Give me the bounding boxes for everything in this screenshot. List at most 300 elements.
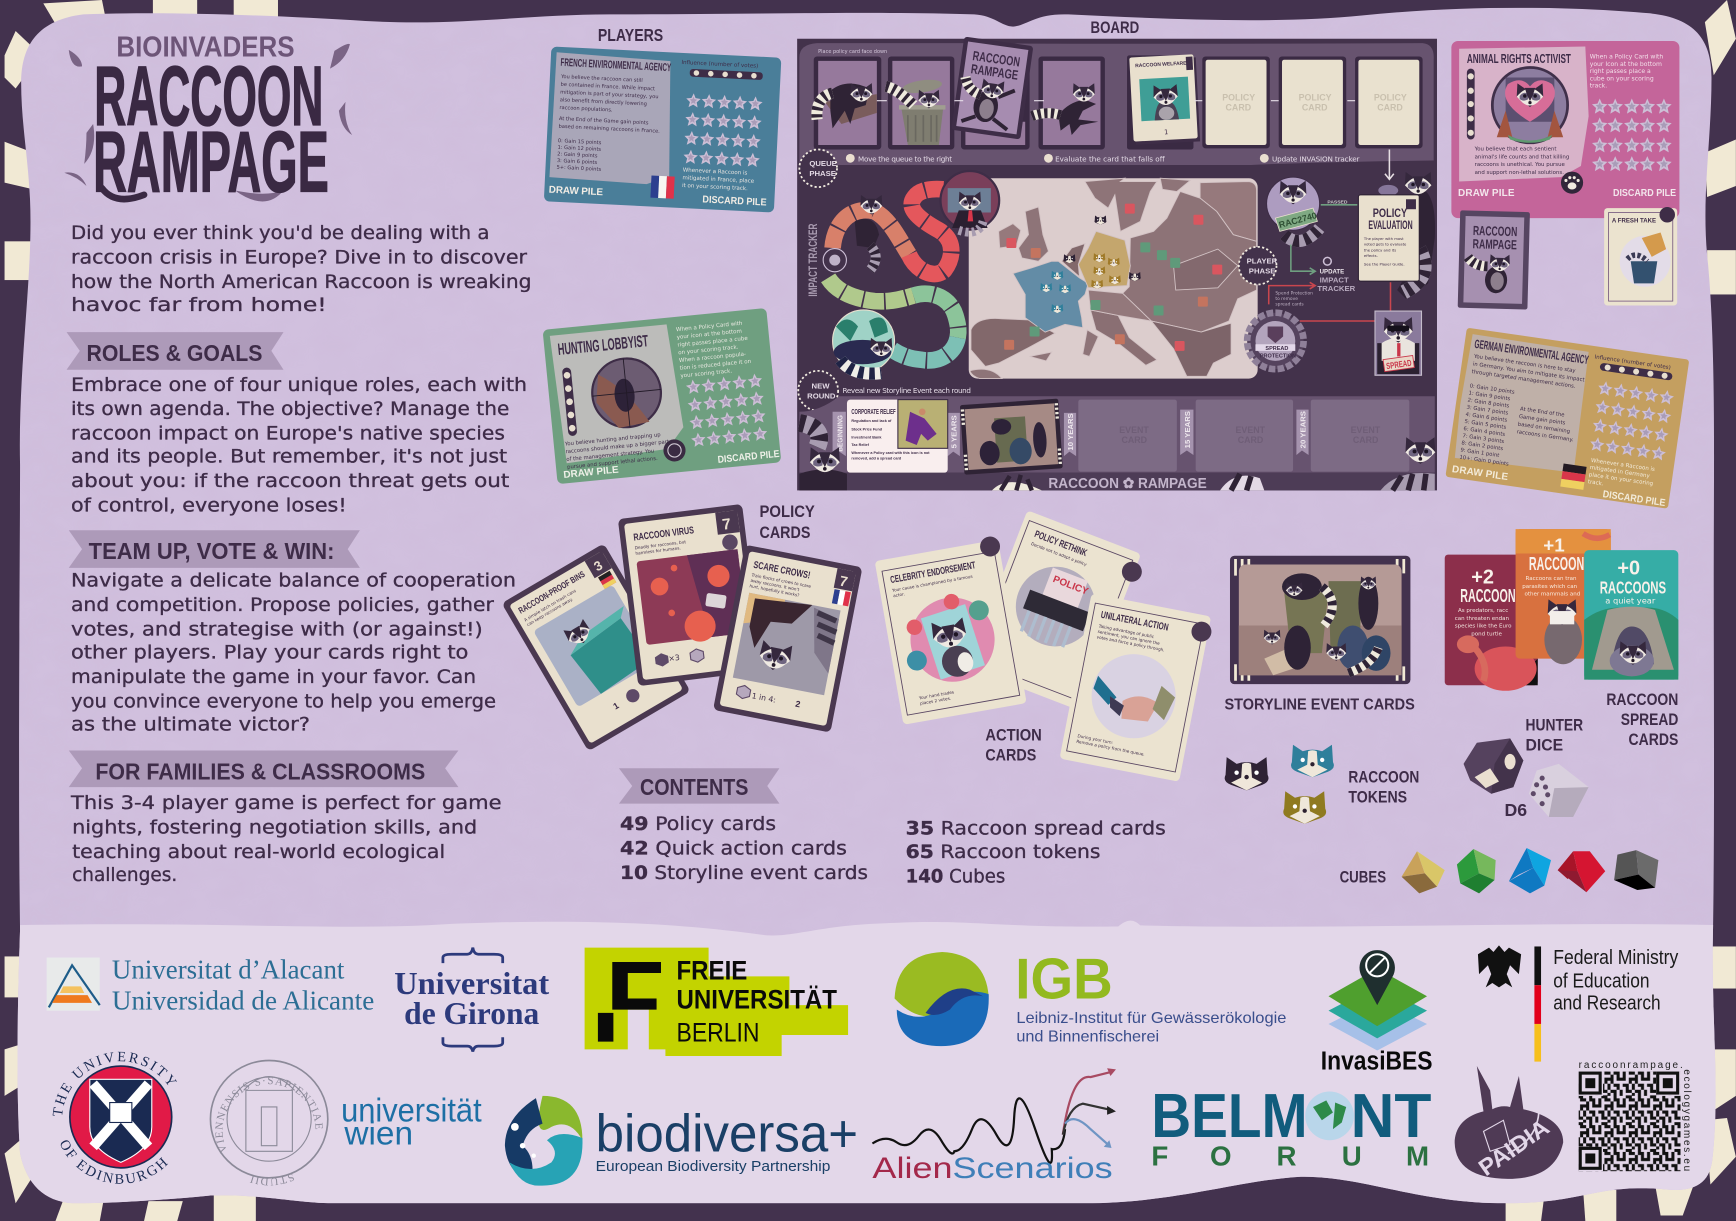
label: hunter dice: [1526, 716, 1583, 755]
raccoon spread card +2: [1445, 555, 1538, 691]
action card: policy rethink: POLICY: [1051, 574, 1090, 598]
logo: IGB: Leibniz-Institut für Gewässerökologie: [1016, 1010, 1286, 1027]
title logo: [64, 31, 352, 211]
logo: Federal Ministry of Education and Research: Federal Ministry: [1553, 947, 1678, 969]
player board: Animal Rights Activist: DISCARD PILE: [1613, 188, 1676, 199]
player board: German Environmental Agency: DRAW PILE: [1451, 464, 1509, 483]
raccoon spread card +1: other mammals and: [1524, 592, 1580, 598]
player board: Hunting Lobbyist: When a raccoon popula-: [679, 352, 746, 364]
board: player phase marker: PLAYER: [1247, 256, 1278, 265]
player board: Animal Rights Activist: [1451, 41, 1679, 218]
player board: Animal Rights Activist: When a Policy Card with: [1590, 54, 1663, 61]
icon: hunter die: [1464, 738, 1523, 794]
action card: celebrity endorsement: actor.: [893, 591, 905, 598]
board: events band: [799, 396, 1435, 492]
action card: policy rethink: Decide not to adopt a policy: [1030, 541, 1088, 567]
player board: German Environmental Agency: 10+: Gain 0 points: [1459, 455, 1509, 468]
board: bottom banner: [992, 474, 1264, 492]
action card: unilateral action: UNILATERAL ACTION: [1100, 610, 1169, 634]
player board: Hunting Lobbyist: You believe hunting and trapping up: [564, 432, 662, 448]
icon: sleeping raccoon on log: [817, 83, 877, 128]
label: d6: D6: [1505, 800, 1527, 820]
roles text: its own agenda. The objective? Manage the: [71, 399, 509, 420]
board: events band: CARD: [1121, 435, 1148, 445]
board: policy evaluation card: EVALUATION: [1368, 218, 1413, 232]
board: Europe map: [969, 178, 1258, 379]
action card: celebrity endorsement: [874, 535, 1028, 725]
contents list right: 140 Cubes: [906, 866, 1005, 887]
player board: French Environmental Agency: 2: Gain 9 points: [557, 151, 598, 159]
board: spread raccoon card: [1375, 311, 1421, 375]
families text: challenges.: [72, 865, 177, 886]
heading: team up: [69, 530, 360, 568]
card: corporate relief: removed, add a spread card: [851, 456, 902, 460]
action card: policy rethink: [967, 510, 1148, 714]
board: new round marker: NEW: [812, 382, 830, 391]
policy card: raccoon virus: ×3: [668, 653, 680, 663]
card: storyline on board: [960, 399, 1063, 475]
logo: Belmont Forum: M: [1406, 1141, 1429, 1172]
logo: Universitat de Girona: Universitat: [394, 965, 550, 1001]
action card: unilateral action: During your turn:: [1077, 733, 1113, 745]
logo: Universitaet Wien seal: universität: [341, 1092, 482, 1129]
player board: German Environmental Agency: 8: Gain 2 points: [1461, 440, 1504, 452]
raccoon tokens: [1225, 745, 1334, 824]
player board: German Environmental Agency: DISCARD PILE: [1602, 489, 1666, 509]
board: queue band: CARD: [1377, 103, 1403, 113]
logo: Freie Universitaet Berlin: FREIE: [676, 956, 747, 986]
team up text: you convince everyone to help you emerge: [71, 691, 496, 712]
board: queue band: POLICY: [1299, 93, 1332, 103]
player board: French Environmental Agency: 1: Gain 12 points: [557, 145, 602, 153]
policy card: raccoon virus: [618, 504, 762, 686]
board: arrows and update label: Spend Protection: [1275, 290, 1313, 296]
board: policy evaluation card: [1358, 195, 1419, 281]
label: board: BOARD: [1091, 18, 1139, 37]
logo: Paidia: PAIDIA: [1474, 1114, 1554, 1181]
raccoon spread card +1: parasites which can: [1522, 584, 1578, 590]
contents list right: 35 Raccoon spread cards: [906, 819, 1166, 840]
heading: roles and goals: ROLES & GOALS: [86, 340, 262, 366]
raccoon spread card +0: +0: [1617, 558, 1640, 580]
action card: celebrity endorsement: CELEBRITY ENDORSEMENT: [889, 560, 976, 586]
player board: German Environmental Agency: in Germany. You aim to mitigate its impact: [1472, 361, 1585, 383]
roles text: about you: if the raccoon threat gets out: [71, 471, 509, 492]
player board: Hunting Lobbyist: of the management strategy. You: [566, 448, 654, 463]
player board: French Environmental Agency: [544, 46, 781, 213]
logo: Belmont Forum: [1151, 1082, 1432, 1172]
player board: Animal Rights Activist: ANIMAL RIGHTS ACTIVIST: [1467, 51, 1571, 66]
logo: Freie Universitaet Berlin: BERLIN: [676, 1018, 760, 1048]
families text: nights, fostering negotiation skills, and: [72, 818, 477, 839]
policy card: scare crows: SCARE CROWS!: [752, 560, 811, 582]
policy card stack on board: 1: [1164, 128, 1169, 136]
logo: Universitaet Wien seal: STUDII: [250, 1174, 294, 1186]
action card: policy rethink: POLICY RETHINK: [1033, 529, 1089, 559]
team up text: and competition. Propose policies, gather: [71, 595, 494, 616]
player board: German Environmental Agency: Game gain points: [1518, 414, 1566, 427]
player board: German Environmental Agency: Whenever a Raccoon is: [1590, 458, 1655, 473]
policy card: scare crows: 7: [838, 574, 849, 591]
policy card: raccoon-proof bins: 3: [591, 558, 605, 574]
QR code: ecologygames.eu: [1681, 1069, 1692, 1171]
board: arrows and update label: to remove: [1275, 296, 1298, 302]
label: storyline event cards: STORYLINE EVENT CARDS: [1224, 697, 1415, 714]
raccoon spread card +1: RACCOON: [1529, 553, 1584, 574]
player board: French Environmental Agency: mitigation is part of your strategy, you: [560, 89, 659, 100]
board: arrows and update label: TRACKER: [1317, 284, 1356, 293]
logo: InvasiBES: [1321, 950, 1433, 1075]
player board: French Environmental Agency: DISCARD PILE: [702, 194, 767, 209]
raccoon spread card +2: As predators, racc: [1458, 608, 1508, 614]
label: cubes: CUBES: [1340, 867, 1386, 886]
board: queue band: Move the queue to the right: [858, 155, 952, 164]
card: corporate relief: CORPORATE RELIEF: [851, 407, 896, 416]
card: corporate relief: Investment Bank: [851, 435, 882, 439]
policy card: scare crows: 1 in 4:: [751, 691, 777, 705]
logo: IGB: und Binnenfischerei: [1016, 1029, 1159, 1046]
policy card: raccoon-proof bins: 1: [611, 700, 621, 712]
player board: French Environmental Agency: based on remaining raccoons in France.: [558, 124, 660, 135]
player board: Hunting Lobbyist: right passes place a cube: [677, 336, 749, 349]
player board: Hunting Lobbyist: tion is reduced place it on: [680, 359, 752, 372]
logo: Belmont Forum: O: [1210, 1141, 1232, 1172]
player board: Hunting Lobbyist: raccoons should make up a bigger part: [565, 439, 669, 455]
player board: German Environmental Agency: At the End of the: [1520, 406, 1565, 419]
logo: Freie Universitaet Berlin: UNIVERSITÄT: [676, 984, 837, 1014]
contents heading: CONTENTS: [640, 774, 748, 800]
board: policy evaluation card: POLICY: [1373, 206, 1407, 220]
raccoon spread card +1: [1516, 529, 1611, 664]
player board: German Environmental Agency: raccoons in Germany.: [1516, 429, 1574, 443]
logo: Federal Ministry of Education and Research: of Education: [1553, 970, 1650, 992]
logo: AlienScenarios: [872, 1068, 1116, 1185]
player board: German Environmental Agency: GERMAN ENVIRONMENTAL AGENCY: [1474, 337, 1590, 367]
player board: Hunting Lobbyist: on your scoring track.: [678, 344, 739, 356]
board: impact tracker label: IMPACT TRACKER: [806, 223, 820, 297]
icon: raccoon heart sign: [1492, 68, 1568, 143]
policy card: scare crows: Train flocks of crows to scare: [750, 572, 812, 589]
intro text: Did you ever think you'd be dealing with a: [71, 223, 489, 244]
player board: German Environmental Agency: 4: Gain 6 points: [1465, 412, 1508, 424]
icon: running raccoon: [1032, 83, 1098, 135]
board: policy evaluation card: voted gets to evaluate: [1364, 243, 1407, 247]
logo: IGB: [895, 947, 1286, 1046]
raccoon spread card +0: a quiet year: [1605, 595, 1656, 605]
title logo: BIOINVADERS: [116, 31, 295, 63]
player board: Animal Rights Activist: You believe that each sentient: [1474, 147, 1557, 153]
player board: French Environmental Agency: it on your scoring track.: [682, 183, 748, 192]
board: lobbyist raccoon circle: RAC2740: [1278, 210, 1318, 230]
player board: German Environmental Agency: Influence (number of votes): [1594, 354, 1671, 371]
board: queue phase marker: PHASE: [809, 169, 836, 178]
logo: Belmont Forum: R: [1276, 1141, 1296, 1172]
board: policy evaluation card: See the Player Guide.: [1364, 263, 1405, 267]
contents list left: 42 Quick action cards: [620, 839, 847, 860]
player board: German Environmental Agency: 7: Gain 3 points: [1462, 433, 1505, 445]
board: events band: 20 YEARS: [1298, 411, 1307, 448]
policy card: raccoon virus: RACCOON VIRUS: [633, 525, 695, 544]
impact tracker path: [828, 189, 958, 360]
policy card back: RAMPAGE: [1472, 236, 1517, 252]
team up text: Navigate a delicate balance of cooperation: [71, 571, 516, 592]
board: new round marker: ROUND: [807, 392, 836, 401]
player board: Hunting Lobbyist: [543, 308, 781, 484]
logo: Universitat de Girona: de Girona: [404, 995, 539, 1031]
board: player phase marker: [1239, 247, 1278, 284]
policy card: scare crows: 2: [794, 699, 801, 709]
player board: German Environmental Agency: 2: Gain 8 points: [1467, 398, 1510, 410]
logo: Belmont Forum: F: [1151, 1141, 1168, 1172]
policy card back: RACCOON: [1473, 223, 1517, 239]
raccoon spread card +2: +2: [1471, 566, 1494, 588]
player board: French Environmental Agency: also benefit from directly lowering: [560, 97, 647, 107]
board: policy evaluation card: The player with most: [1363, 237, 1404, 241]
player board: German Environmental Agency: track.: [1587, 479, 1604, 487]
roles text: [71, 375, 527, 516]
board: queue band: CARD: [1302, 103, 1328, 113]
label: raccoon tokens: [1348, 768, 1419, 807]
label: policy cards: [760, 502, 815, 542]
player board: German Environmental Agency: mitigated in Germany: [1589, 465, 1651, 480]
intro text: raccoon crisis in Europe? Dive in to discover: [71, 247, 527, 268]
logo: Freie Universitaet Berlin: [585, 948, 848, 1056]
policy card: raccoon-proof bins: [502, 543, 691, 751]
storyline event card: [1230, 556, 1410, 684]
board: queue band: POLICY: [1222, 93, 1255, 103]
player board: German Environmental Agency: based on remaining: [1517, 422, 1570, 435]
player board: Animal Rights Activist: animal's life counts and that killing: [1475, 154, 1569, 160]
policy card: raccoon virus: harmless for humans.: [635, 545, 681, 556]
board: events band: CARD: [1238, 435, 1264, 445]
board: policy evaluation card: effects.: [1364, 254, 1378, 258]
board: raccoon behind policy evaluation: [1378, 172, 1435, 299]
player board: German Environmental Agency: 5: Gain 5 points: [1464, 419, 1507, 431]
raccoon spread card +0: RACCOONS: [1600, 577, 1666, 597]
label: raccoon spread cards: [1606, 690, 1678, 749]
card back on board: RACCOON: [972, 48, 1021, 70]
player board: German Environmental Agency: [1445, 328, 1689, 510]
team up text: votes, and strategise with (or against!): [71, 619, 483, 640]
contents list left: [620, 814, 868, 884]
player board: German Environmental Agency: place it on your scoring: [1588, 472, 1653, 487]
team up text: other players. Play your cards right to: [71, 643, 468, 664]
team up text: manipulate the game in your favor. Can: [71, 667, 476, 688]
policy card stack on board: [1127, 54, 1200, 149]
board: bottom banner: RACCOON ✿ RAMPAGE: [1048, 476, 1207, 492]
contents list right: [906, 819, 1166, 887]
policy card: scare crows: away raccoons. It won't: [750, 578, 800, 592]
board: spread raccoon card: SPREAD: [1386, 358, 1413, 371]
action card: celebrity endorsement: places 2 votes.: [920, 696, 951, 706]
label: policy cards: CARDS: [760, 523, 810, 542]
logo: InvasiBES: InvasiBES: [1321, 1047, 1433, 1075]
QR code: [1579, 1060, 1692, 1171]
logo: Belmont Forum: NT: [1351, 1082, 1432, 1151]
logo: biodiversa+: European Biodiversity Partnership: [596, 1159, 830, 1175]
heading: team up: TEAM UP, VOTE & WIN:: [89, 538, 334, 564]
policy card: raccoon-proof bins: RACCOON-PROOF BINS: [517, 569, 587, 616]
logo: AlienScenarios: Alien Scenarios: [872, 1152, 1113, 1185]
board: queue band: Evaluate the card that falls off: [1055, 155, 1166, 164]
board: spread protection wheel: SPREAD: [1265, 346, 1288, 352]
board: arrows and update label: IMPACT: [1320, 275, 1349, 284]
logo: Belmont Forum: U: [1342, 1141, 1362, 1172]
policy card: raccoon virus: 7: [721, 516, 732, 534]
families text: teaching about real-world ecological: [72, 842, 445, 863]
player board: French Environmental Agency: 5+: Gain 0 points: [556, 165, 602, 173]
logo: University of Edinburgh: OF EDINBURGH: [60, 1140, 168, 1184]
board: events band: EVENT: [1119, 425, 1149, 435]
player board: Animal Rights Activist: raccoons is unethical. You pursue: [1475, 162, 1566, 168]
intro text: [71, 223, 531, 316]
player board: French Environmental Agency: be contained in France. While impact: [560, 82, 655, 92]
logo: Universitaet Wien seal: VIENNENSIS S·SAPIENTIAE: [215, 1078, 323, 1154]
player board: German Environmental Agency: 0: Gain 10 points: [1469, 383, 1515, 396]
board: player phase marker: PHASE: [1249, 266, 1275, 275]
board: events band: EVENT: [1236, 425, 1266, 435]
card back on board: [951, 37, 1033, 139]
board: queue band: Update INVASION tracker: [1272, 155, 1360, 164]
player board: Animal Rights Activist: DRAW PILE: [1458, 188, 1515, 199]
label: players: PLAYERS: [598, 25, 663, 45]
QR code: raccoonrampage.: [1579, 1060, 1683, 1071]
board: queue band: Place policy card face down: [818, 49, 887, 55]
label: action cards: [985, 726, 1042, 764]
icon: politician raccoon circle: [941, 171, 999, 232]
roles text: of control, everyone loses!: [71, 495, 347, 516]
icon: green sleeping raccoon circle: [833, 310, 895, 374]
card: corporate relief: Stock Price Fund: [851, 428, 883, 432]
player board: Animal Rights Activist: right passes place a: [1590, 68, 1651, 75]
player board: French Environmental Agency: 3: Gain 6 points: [557, 158, 598, 166]
player board: Animal Rights Activist: and support non-lethal solutions.: [1475, 170, 1564, 176]
board: spread protection wheel: PROTECTION: [1260, 354, 1296, 360]
logo: biodiversa+: [505, 1096, 858, 1186]
policy card: scare crows: hurt, hopefully it works?: [749, 583, 800, 598]
policy card: raccoon virus: Deadly for raccoons, but: [634, 539, 687, 550]
player board: German Environmental Agency: 9: Gain 1 point: [1460, 447, 1500, 459]
policy card: scare crows: [713, 545, 862, 733]
board: corner raccoons: [799, 423, 1435, 490]
icon: track start marker: [823, 249, 846, 272]
action card: unilateral action: sentiment, you can ignore the: [1097, 629, 1161, 646]
label: action cards: CARDS: [985, 745, 1036, 764]
board: events band: CARD: [1353, 435, 1379, 445]
player board: French Environmental Agency: DRAW PILE: [549, 185, 604, 198]
label: hunter dice: HUNTER: [1526, 716, 1583, 735]
board: queue band: [799, 37, 1434, 165]
board: queue band: CARD: [1226, 103, 1252, 113]
player board: Hunting Lobbyist: your scoring track.: [680, 368, 733, 380]
board: events band: 15 YEARS: [1183, 411, 1192, 448]
contents list right: 65 Raccoon tokens: [906, 842, 1100, 863]
label: raccoon tokens: RACCOON: [1348, 768, 1419, 787]
logo: Universitat de Girona: [394, 948, 550, 1052]
player board: French Environmental Agency: You believe the raccoon can still: [560, 74, 643, 84]
board: queue band: POLICY: [1374, 93, 1407, 103]
action card: unilateral action: Taking advantage of public: [1097, 623, 1155, 639]
logo: University of Edinburgh: [52, 1052, 177, 1184]
action card: celebrity endorsement: Your cause is championed by a famous: [891, 574, 973, 593]
board: queue phase marker: [799, 149, 837, 187]
raccoon spread card +2: RACCOON: [1460, 585, 1516, 606]
logo: Belmont Forum: BELM: [1151, 1082, 1307, 1151]
action card: unilateral action: Remove a policy from the queue.: [1076, 739, 1145, 757]
player board: German Environmental Agency: 3: Gain 7 points: [1466, 405, 1509, 417]
player board: French Environmental Agency: 0: Gain 15 points: [558, 138, 602, 146]
contents list left: 49 Policy cards: [620, 814, 776, 835]
logo: Federal Ministry of Education and Research: and Research: [1553, 993, 1661, 1015]
raccoon spread card +0: [1584, 550, 1678, 680]
board: policy evaluation card: the policy and its: [1364, 248, 1396, 252]
logo: IGB: IGB: [1015, 947, 1113, 1011]
board: events band: 10 YEARS: [1066, 413, 1075, 451]
logo: Federal Ministry of Education and Research: [1478, 945, 1678, 1062]
board: spread protection wheel: [1247, 313, 1304, 369]
player board: Hunting Lobbyist: When a Policy Card with: [676, 321, 743, 333]
board: events band: BEGINNING: [836, 415, 845, 452]
board: events band: 5 YEARS: [950, 415, 959, 448]
title logo: RACCOON: [94, 49, 323, 143]
team up text: as the ultimate victor?: [71, 715, 310, 736]
board: lobbyist raccoon circle: [1267, 177, 1320, 241]
icon: white d6: [1529, 764, 1589, 817]
board: arrows and update label: PASSED: [1327, 200, 1348, 206]
raccoon spread card +2: species like the Euro: [1455, 624, 1512, 630]
player board: Animal Rights Activist: cube on your scoring: [1590, 75, 1654, 82]
policy card back: [1458, 210, 1530, 310]
player board: Hunting Lobbyist: HUNTING LOBBYIST: [557, 331, 649, 359]
heading: for families: FOR FAMILIES & CLASSROOMS: [95, 758, 425, 784]
board: new round marker: [798, 371, 838, 411]
player board: German Environmental Agency: 1: Gain 9 points: [1468, 390, 1511, 402]
player board: Hunting Lobbyist: DRAW PILE: [563, 465, 619, 481]
player board: Hunting Lobbyist: your icon at the bottom: [677, 329, 742, 341]
board: new round text: Reveal new Storyline Event each round: [843, 386, 971, 395]
roles text: Embrace one of four unique roles, each with: [71, 375, 527, 396]
families text: This 3-4 player game is perfect for game: [70, 793, 502, 814]
cubes: [1402, 848, 1658, 893]
policy card: raccoon-proof bins: A simple latch on trash cans: [523, 588, 577, 622]
label: hunter dice: DICE: [1526, 736, 1563, 755]
label: policy cards: POLICY: [760, 502, 815, 521]
card back on board: RAMPAGE: [970, 61, 1019, 83]
policy card stack on board: RACCOON WELFARE: [1135, 61, 1187, 69]
player board: Hunting Lobbyist: DISCARD PILE: [717, 449, 780, 466]
title logo: RAMPAGE: [93, 115, 329, 211]
icon: crosshair scope: [589, 355, 664, 430]
logo: University of Edinburgh: THE UNIVERSITY: [52, 1052, 177, 1116]
raccoon spread card +1: +1: [1543, 534, 1565, 555]
player board: Animal Rights Activist: track.: [1590, 82, 1607, 89]
raccoon spread card +2: pond turtle: [1471, 631, 1503, 637]
player board: French Environmental Agency: At the End of the Game gain points: [559, 116, 649, 126]
card: corporate relief: Regulation and lack of: [851, 419, 892, 423]
raccoon spread card +2: can threaten endan: [1455, 616, 1510, 622]
logo: Paidia: [1455, 1066, 1563, 1181]
roles text: and its people. But remember, it's not just: [71, 447, 507, 468]
card: corporate relief: Tax Relief: [851, 443, 870, 447]
icon: trash can raccoon: [886, 78, 945, 145]
board: arrows and update label: UPDATE: [1320, 268, 1344, 275]
player board: French Environmental Agency: FRENCH ENVIRONMENTAL AGENCY: [560, 57, 672, 74]
policy card: raccoon-proof bins: can keep raccoons away.: [526, 596, 574, 627]
intro text: how the North American Raccoon is wreaking: [71, 272, 531, 293]
logo: Universitat d'Alacant: Universitat d’Alacant: [112, 954, 345, 985]
label: action cards: ACTION: [985, 726, 1042, 745]
player board: German Environmental Agency: through targeted management actions.: [1471, 369, 1576, 390]
